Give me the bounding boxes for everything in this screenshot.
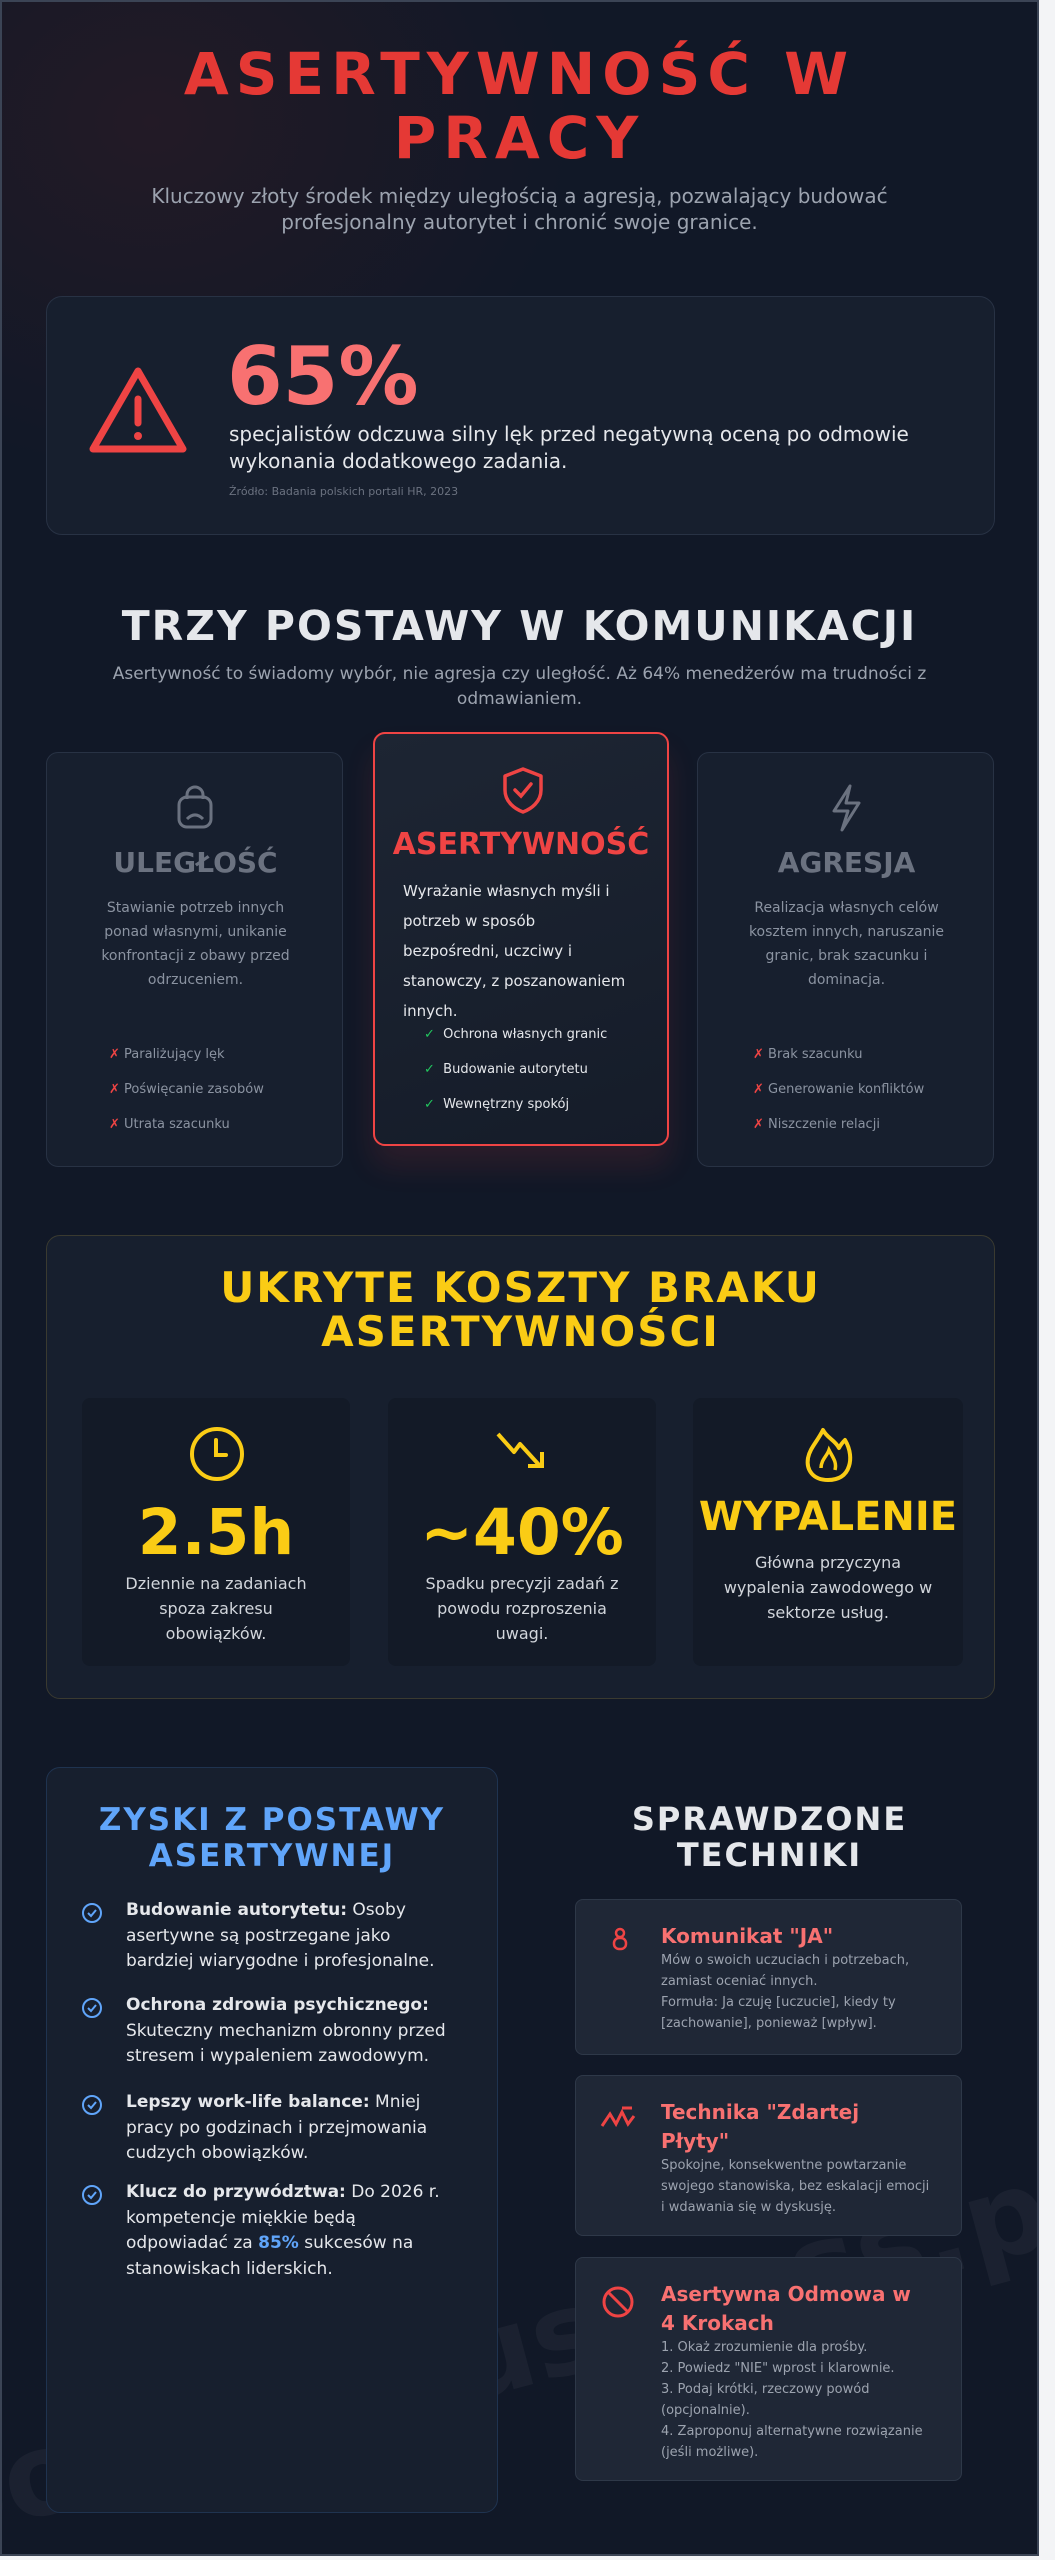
bullets: ✓ Ochrona własnych granic bbox=[424, 1027, 607, 1042]
heading: ASERTYWNOŚCI bbox=[321, 1307, 720, 1356]
description bbox=[661, 1953, 909, 2031]
title: Komunikat "JA" bbox=[661, 1924, 833, 1948]
bullets: ✗ Utrata szacunku bbox=[109, 1117, 230, 1132]
source: Źródło: Badania polskich portali HR, 2023 bbox=[229, 485, 458, 498]
description: Dziennie na zadaniach spoza zakresu obowiązków. bbox=[125, 1574, 307, 1643]
subheading: Asertywność to świadomy wybór, nie agresja czy uległość. Aż 64% menedżerów ma trudności z odmawianiem. bbox=[113, 664, 926, 709]
description: Realizacja własnych celów kosztem innych, naruszanie granic, brak szacunku i dominacja. bbox=[749, 900, 944, 988]
cost: precision bbox=[388, 1398, 656, 1666]
benefit: mental health: Ochrona zdrowia psychicznego: Skuteczny mechanizm obronny przed stresem i wypaleniem zawodowym. bbox=[126, 1995, 446, 2066]
icon: lightning bbox=[832, 784, 860, 832]
description: Spokojne, konsekwentne powtarzanie swojego stanowiska, bez eskalacji emocji i wdawania się w dyskusję. bbox=[661, 2158, 929, 2215]
bullets: ✗ Poświęcanie zasobów bbox=[109, 1082, 264, 1097]
icon: trend down bbox=[496, 1432, 544, 1468]
icon: shield check bbox=[503, 767, 543, 814]
heading: techniques: TECHNIKI bbox=[677, 1836, 862, 1874]
bullets: ✗ Niszczenie relacji bbox=[753, 1117, 880, 1132]
panel: benefits bbox=[46, 1767, 498, 2513]
value: 2.5h bbox=[138, 1496, 294, 1569]
description: Formuła: Ja czuję [uczucie], kiedy ty [zachowanie], ponieważ [wpływ]. bbox=[661, 1995, 896, 2031]
icon: person bbox=[612, 1928, 628, 1950]
description: Spadku precyzji zadań z powodu rozproszenia uwagi. bbox=[426, 1574, 618, 1643]
heading: UKRYTE KOSZTY BRAKU bbox=[220, 1263, 821, 1312]
panel: asertywność bbox=[373, 732, 669, 1146]
steps: 4. Zaproponuj alternatywne rozwiązanie (jeśli możliwe). bbox=[661, 2424, 923, 2460]
steps: 3. Podaj krótki, rzeczowy powód (opcjonalnie). bbox=[661, 2382, 869, 2418]
title: PRACY bbox=[394, 104, 645, 172]
value: ~40% bbox=[420, 1496, 624, 1569]
description: Mów o swoich uczuciach i potrzebach, zamiast oceniać innych. bbox=[661, 1953, 909, 1989]
panel: hidden costs bbox=[46, 1235, 995, 1699]
bullets bbox=[753, 1047, 924, 1132]
bullets: ✗ Generowanie konfliktów bbox=[753, 1082, 924, 1097]
stat card: 65% bbox=[46, 296, 995, 535]
icon: flame bbox=[806, 1428, 852, 1482]
benefit list bbox=[82, 1900, 446, 2278]
description: Główna przyczyna wypalenia zawodowego w sektorze usług. bbox=[724, 1553, 932, 1622]
cost: burnout bbox=[693, 1398, 963, 1666]
heading bbox=[99, 1802, 445, 1874]
heading: techniques bbox=[632, 1800, 907, 1874]
icon: ban bbox=[602, 2286, 634, 2318]
heading: ULEGŁOŚĆ bbox=[113, 846, 278, 879]
panel: uległość bbox=[46, 752, 343, 1167]
heading bbox=[220, 1263, 821, 1356]
title bbox=[184, 40, 855, 172]
benefit: leadership: Klucz do przywództwa: Do 2026 r. kompetencje miękkie będą odpowiadać za 85% sukcesów na stanowiskach liderskich. bbox=[126, 2182, 440, 2278]
value: WYPALENIE bbox=[699, 1494, 957, 1540]
heading: AGRESJA bbox=[778, 846, 915, 879]
description: Wyrażanie własnych myśli i potrzeb w sposób bezpośredni, uczciwy i stanowczy, z poszanowaniem innych. bbox=[403, 882, 625, 1020]
technique card: refusal bbox=[575, 2257, 962, 2481]
steps bbox=[661, 2340, 923, 2460]
title: Technika "Zdartej Płyty" bbox=[661, 2100, 859, 2153]
benefit: authority: Budowanie autorytetu: Osoby asertywne są postrzegane jako bardziej wiarygodne i profesjonalne. bbox=[126, 1900, 435, 1971]
bullets bbox=[109, 1047, 264, 1132]
bullets: ✗ Paraliżujący lęk bbox=[109, 1047, 225, 1062]
cost: time bbox=[82, 1398, 350, 1666]
stat description: specjalistów odczuwa silny lęk przed negatywną oceną po odmowie wykonania dodatkowego zadania. bbox=[229, 422, 909, 473]
icon: clock bbox=[190, 1427, 244, 1481]
bullets: ✓ Wewnętrzny spokój bbox=[424, 1097, 569, 1112]
title: Asertywna Odmowa w 4 Krokach bbox=[661, 2282, 911, 2335]
heading: ZYSKI Z POSTAWY bbox=[99, 1802, 445, 1838]
bullets: ✗ Brak szacunku bbox=[753, 1047, 862, 1062]
icon: warning triangle bbox=[90, 368, 186, 452]
heading: ASERTYWNEJ bbox=[149, 1838, 395, 1874]
steps: 1. Okaż zrozumienie dla prośby. bbox=[661, 2340, 867, 2355]
bullets: ✓ Budowanie autorytetu bbox=[424, 1062, 588, 1077]
bullets bbox=[424, 1027, 607, 1112]
icon: record bbox=[600, 2106, 636, 2127]
technique card: I-message bbox=[575, 1899, 962, 2055]
description: Stawianie potrzeb innych ponad własnymi, unikanie konfrontacji z obawy przed odrzuceniem. bbox=[101, 900, 290, 988]
title: ASERTYWNOŚĆ W bbox=[184, 40, 855, 108]
steps: 2. Powiedz "NIE" wprost i klarownie. bbox=[661, 2361, 895, 2376]
subtitle: Kluczowy złoty środek między uległością a agresją, pozwalający budować profesjonalny autorytet i chronić swoje granice. bbox=[151, 184, 888, 234]
stat number: 65% bbox=[227, 330, 418, 423]
icon: sad face bbox=[178, 786, 212, 828]
heading: techniques: SPRAWDZONE bbox=[632, 1800, 907, 1838]
technique card: broken record bbox=[575, 2075, 962, 2236]
benefit: work-life balance: Lepszy work-life balance: Mniej pracy po godzinach i przejmowania cudzych obowiązków. bbox=[126, 2092, 427, 2163]
heading: ASERTYWNOŚĆ bbox=[393, 827, 649, 862]
heading: three attitudes: TRZY POSTAWY W KOMUNIKACJI bbox=[122, 602, 917, 650]
panel: agresja bbox=[697, 752, 994, 1167]
